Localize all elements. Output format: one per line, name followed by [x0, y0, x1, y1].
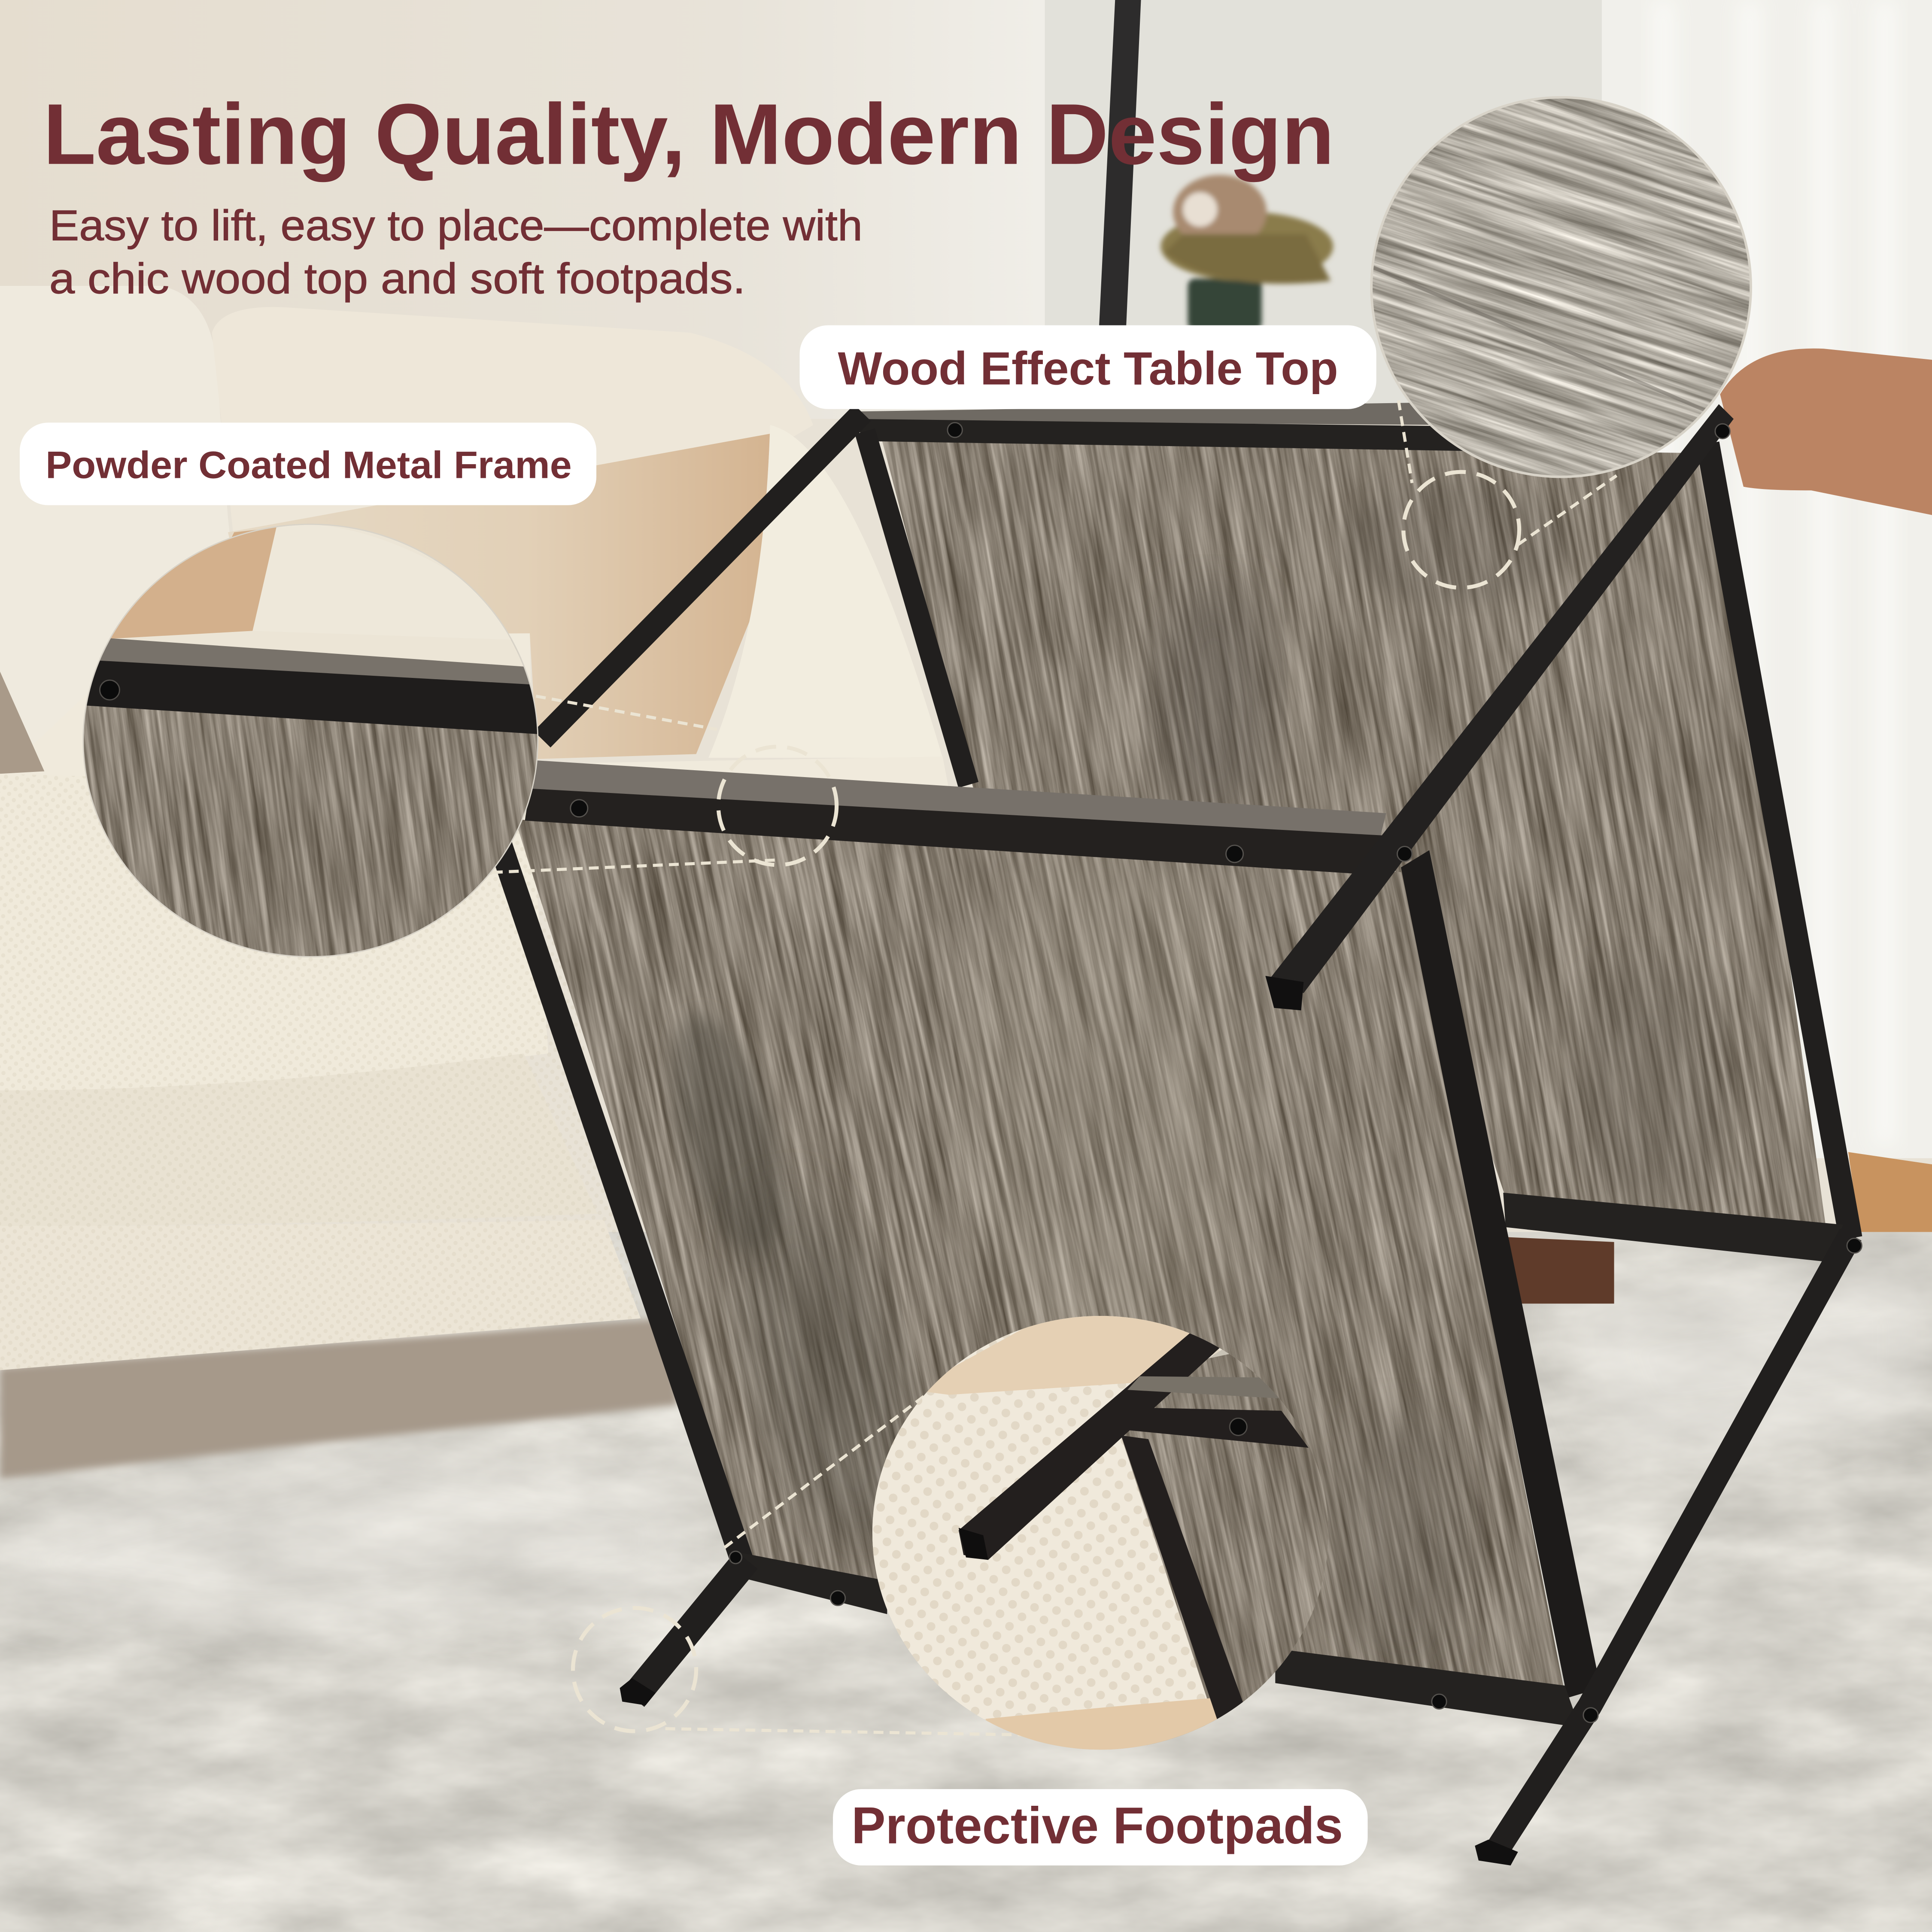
white pillow detail — [252, 523, 542, 641]
plant in vase — [1160, 175, 1333, 330]
front right leg — [1401, 850, 1601, 1698]
front top bar — [525, 789, 1382, 875]
left foot tube — [633, 1560, 747, 1698]
seat strip — [0, 633, 949, 813]
label: wood effect table top — [800, 325, 1376, 409]
front left leg — [500, 844, 742, 1560]
grey throw — [0, 671, 44, 774]
wood corner detail — [1071, 1326, 1447, 1798]
hand — [1720, 349, 1932, 515]
subtitle — [49, 202, 863, 303]
lamp pole — [1099, 0, 1141, 327]
base cushion — [0, 1220, 641, 1370]
back left leg — [865, 431, 969, 785]
left foot pad — [620, 1678, 656, 1705]
white pillow right — [708, 425, 942, 758]
tan cushion left edge — [185, 527, 279, 636]
metal frame — [500, 402, 1851, 1865]
dashed target: footpad — [573, 1608, 696, 1731]
connector lines — [493, 401, 1616, 1735]
dashed target: wood top — [1403, 472, 1519, 588]
tan cushion — [228, 434, 770, 759]
tube end cap — [1265, 976, 1303, 1010]
main right diagonal tube — [1269, 404, 1734, 993]
sofa leg — [1506, 1237, 1614, 1303]
back top wood strip — [855, 402, 1479, 425]
sofa — [0, 286, 1614, 1479]
subtitle line 2: a chic wood top and soft footpads. — [49, 255, 745, 303]
magnifier: metal frame — [15, 517, 609, 1022]
back table panel — [882, 441, 1826, 1223]
back cushion centre — [212, 307, 813, 542]
knit sofa detail — [863, 1306, 1245, 1762]
label: protective footpads: Protective Footpads — [851, 1796, 1343, 1854]
back top bar — [857, 419, 1466, 451]
wall: left section — [0, 0, 1045, 419]
black leg detail — [1121, 1435, 1245, 1720]
lower cushion — [0, 1054, 598, 1226]
dashed target: metal frame — [718, 747, 837, 865]
front table panel — [518, 820, 1563, 1686]
back bottom bar — [1503, 1193, 1843, 1262]
front bottom bar — [739, 1552, 887, 1614]
upper sofa detail — [74, 517, 542, 690]
title: Lasting Quality, Modern Design — [43, 86, 1334, 182]
rug — [0, 1232, 1932, 1932]
white pillow left — [252, 529, 493, 635]
tan bottom detail — [986, 1698, 1232, 1762]
wood strip detail — [74, 636, 542, 690]
upper left diagonal tube — [542, 413, 863, 739]
black bar detail — [1119, 1407, 1309, 1448]
floor under sofa — [0, 1318, 677, 1479]
wall: right section — [1045, 0, 1612, 419]
label: powder coated metal frame — [20, 422, 596, 505]
label: wood effect table top: Wood Effect Table Top — [838, 342, 1338, 395]
dashed callout lines — [493, 401, 1616, 1735]
seat cushion — [0, 774, 548, 1091]
front top wood strip — [530, 760, 1386, 838]
back right leg — [1708, 444, 1851, 1238]
magnifier: wood top — [1271, 1, 1857, 580]
tan cushion detail — [74, 525, 279, 641]
wood underside detail — [15, 628, 609, 1022]
frame screws — [571, 422, 1862, 1722]
subtitle line 1: Easy to lift, easy to place—complete with — [49, 202, 863, 250]
back cushion left — [0, 286, 246, 801]
black bar detail — [74, 659, 542, 734]
right foot pad — [1475, 1840, 1518, 1865]
label: powder coated metal frame: Powder Coated Metal Frame — [46, 444, 572, 486]
lower right tube and foot — [1493, 1235, 1851, 1856]
tan top detail — [912, 1309, 1232, 1395]
knit texture — [0, 774, 641, 1370]
curtain — [1602, 0, 1932, 1158]
magnifier: footpads — [863, 1306, 1447, 1798]
black tube detail — [959, 1331, 1222, 1560]
floor right — [1848, 1152, 1932, 1247]
